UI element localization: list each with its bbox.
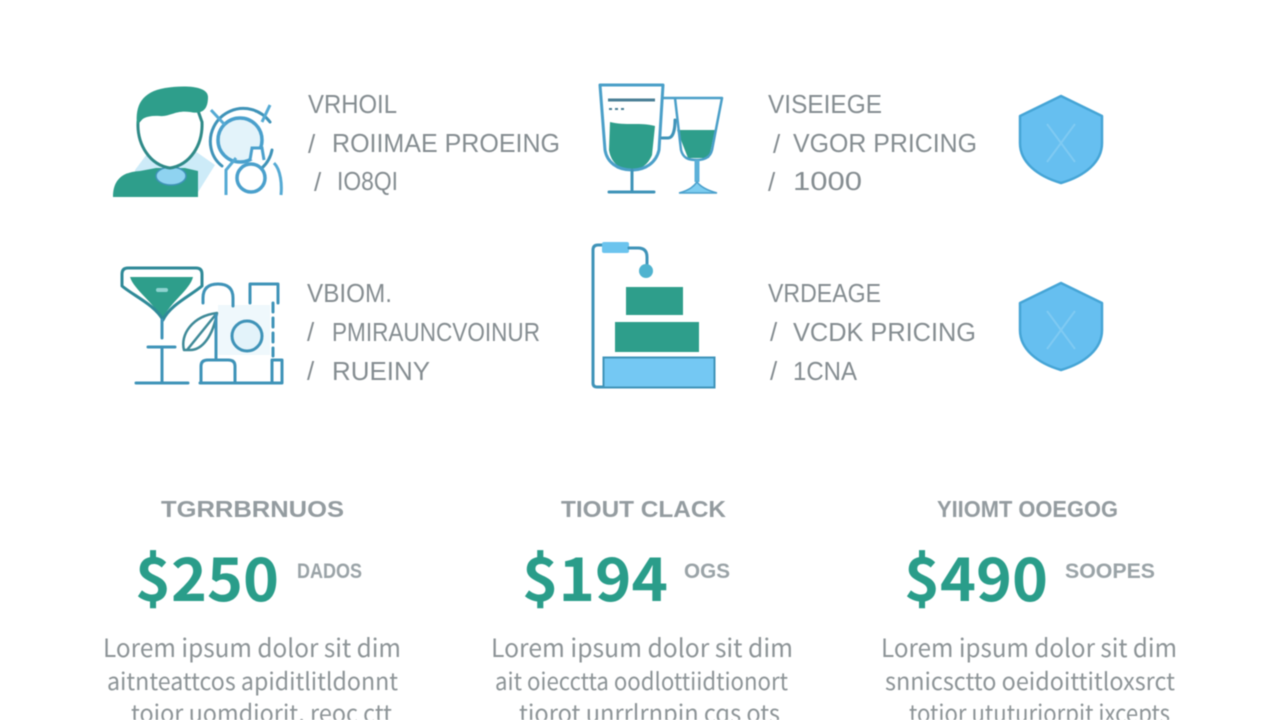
text block: stacked blocks labels: VCDK PRICING [793, 317, 976, 347]
text block: stacked blocks labels: 1CNA [793, 356, 858, 386]
panel: lower left feature, cocktail [122, 268, 540, 386]
icon: stacked blocks with tap [593, 242, 714, 388]
text block: column 2 body: ait oiecctta oodlottiidtionort [495, 662, 788, 697]
text block: column 1 body: Lorem ipsum dolor sit dim [103, 629, 401, 665]
text block: cocktail labels: VBIOM. [307, 278, 392, 308]
unit: column 1: DADOS [297, 560, 362, 583]
unit: column 2: OGS [684, 560, 730, 583]
price: $194: $194 [522, 532, 668, 619]
text block: person labels: VRHOIL [308, 89, 397, 119]
text block: column 2 body: Lorem ipsum dolor sit dim [491, 629, 793, 665]
text block: person labels: ROIIMAE PROEING [332, 128, 560, 158]
panel: lower middle feature, stacked blocks [593, 242, 976, 388]
text block: glasses labels: VISEIEGE [768, 89, 882, 119]
panel: price column 1 [103, 496, 401, 720]
icon: two glasses [600, 85, 722, 193]
text block: cocktail labels: RUEINY [332, 356, 430, 386]
panel: top middle feature, glasses [600, 85, 977, 197]
panel: price column 2 [491, 496, 793, 720]
text block: column 3 body [881, 629, 1177, 720]
text block: glasses labels: / [768, 167, 776, 197]
text block: glasses labels [768, 89, 977, 197]
text block: cocktail labels: / [307, 317, 315, 347]
text block: column 3 body: Lorem ipsum dolor sit dim [881, 629, 1177, 665]
text block: cocktail labels: / [307, 356, 315, 386]
text block: person labels: / [314, 167, 322, 197]
text block: column 1 body [103, 629, 401, 720]
panel: price column 3 [881, 496, 1177, 720]
text block: column 1 body: aitnteattcos apiditlitldonnt [107, 662, 398, 697]
icon: person with gears [113, 87, 281, 197]
unit: column 3: SOOPES [1065, 560, 1155, 583]
price: $250: $250 [135, 532, 279, 619]
icon: shield top [1020, 96, 1102, 183]
text block: glasses labels: VGOR PRICING [793, 128, 977, 158]
text block: stacked blocks labels: / [770, 317, 778, 347]
text block: person labels: IO8QI [337, 166, 398, 196]
text block: person labels [308, 89, 560, 197]
text block: column 2 body [491, 629, 793, 720]
text block: glasses labels: 1000 [793, 166, 862, 196]
heading: column 1: TGRRBRNUOS [161, 496, 344, 522]
text block: cocktail labels [307, 278, 540, 386]
heading: column 2: TIOUT CLACK [561, 496, 726, 522]
panel: top left feature, person [113, 87, 560, 197]
text block: stacked blocks labels: / [770, 356, 778, 386]
icon: shield bottom [1020, 283, 1102, 370]
text block: column 3 body: snnicsctto oeidoittitloxsrct [885, 662, 1175, 697]
icon: cocktail and machine [122, 268, 282, 383]
text block: glasses labels: / [773, 129, 781, 159]
text block: cocktail labels: PMIRAUNCVOINUR [332, 317, 540, 347]
heading: column 3: YIIOMT OOEGOG [937, 496, 1118, 522]
text block: person labels: / [308, 129, 316, 159]
price: $490: $490 [904, 532, 1048, 619]
text block: stacked blocks labels: VRDEAGE [768, 278, 881, 308]
text block: stacked blocks labels [768, 278, 976, 386]
